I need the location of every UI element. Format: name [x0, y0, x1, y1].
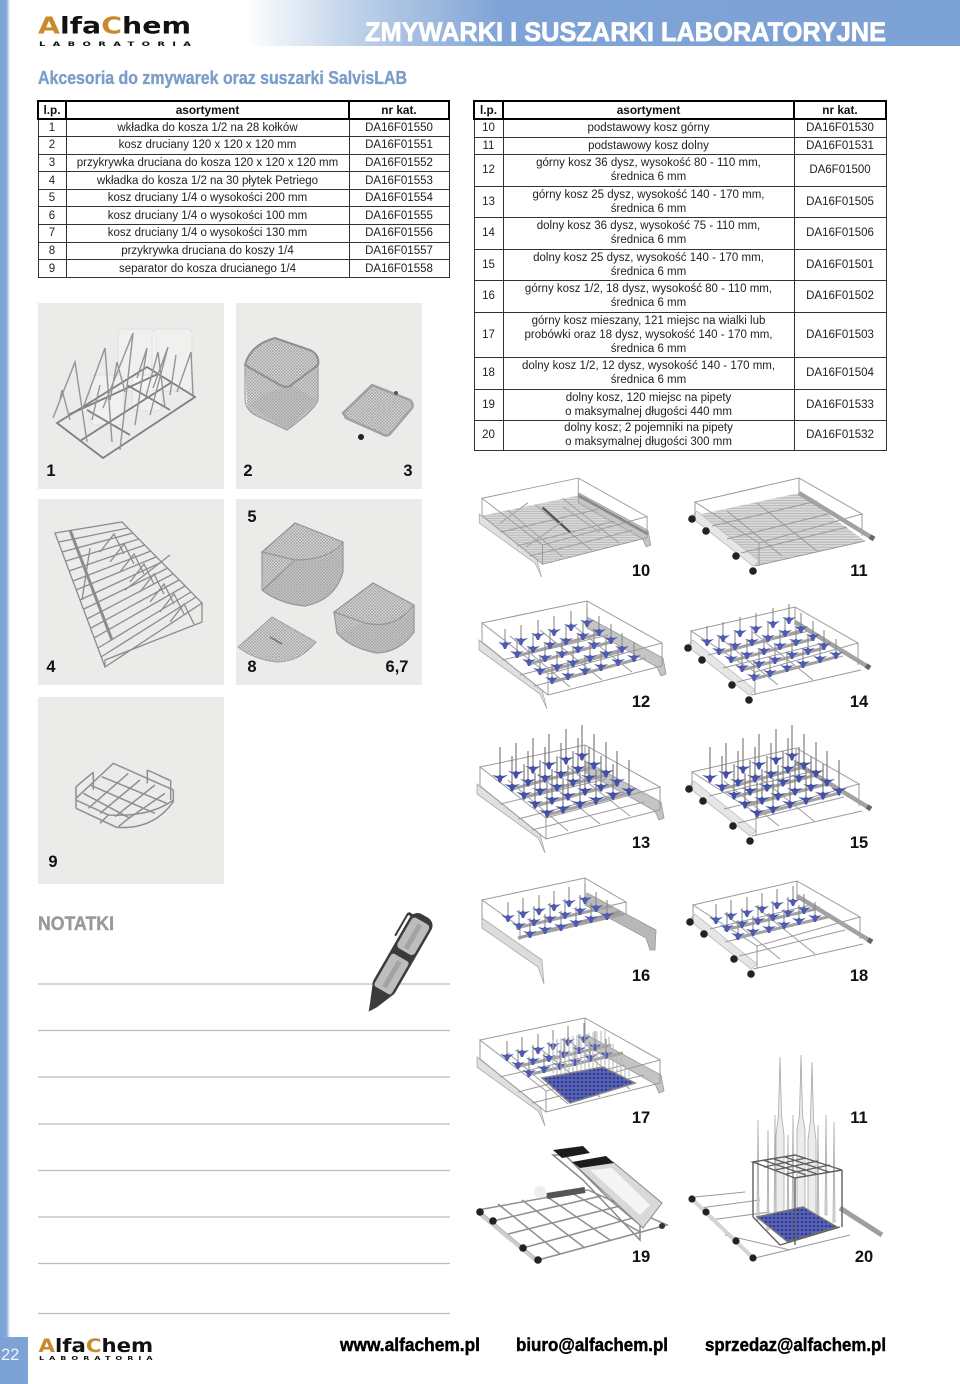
item 16 half rack: [482, 878, 656, 985]
item 20 pipette rack: 20: [855, 1248, 873, 1266]
item 10 upper rack with mesh: [479, 478, 651, 580]
footer logo: LABORATORIA: [39, 1356, 154, 1361]
photo: items 5 6 7 8 semi-round baskets: 8: [247, 658, 257, 676]
item 19 pipette rack: 19: [632, 1248, 650, 1266]
item 13 rack: 13: [632, 834, 650, 852]
notes ruled lines: [38, 984, 450, 1314]
table: accessories 1-9: 9: [49, 263, 55, 275]
logo top: AlfaChem: [38, 13, 191, 40]
icon: pen: [356, 908, 436, 1018]
header gradient band: [245, 0, 960, 46]
table: accessories 10-20: dolny kosz 25 dysz, wysokość 140 - 170 mm,: [533, 252, 764, 264]
photo: item 9 separator: [38, 697, 224, 884]
table: accessories 1-9: DA16F01550: [365, 122, 433, 134]
table: accessories 1-9: 5: [49, 192, 55, 204]
table: accessories 1-9: DA16F01555: [365, 210, 433, 222]
table: accessories 10-20: DA16F01530: [806, 122, 874, 134]
table: accessories 1-9: asortyment: [176, 103, 239, 117]
photo: item 9 separator: 9: [48, 853, 58, 871]
item 11 lower rack with mesh: [688, 478, 874, 580]
photo: items 5 6 7 8 semi-round baskets: [236, 499, 422, 685]
photo: items 5 6 7 8 semi-round baskets: 6,7: [386, 658, 408, 676]
table: accessories 10-20: probówki oraz 18 dysz, wysokość 140 - 170 mm,: [524, 328, 772, 340]
item 18 lower rack: [686, 881, 872, 985]
item 16 half rack: 16: [632, 967, 650, 985]
table: accessories 10-20: dolny kosz 36 dysz, wysokość 75 - 110 mm,: [537, 220, 760, 232]
table: accessories 10-20: DA16F01501: [806, 258, 874, 270]
table: accessories 10-20: 16: [482, 290, 495, 302]
section heading: Akcesoria do zmywarek oraz suszarki SalvisLAB: [38, 68, 407, 88]
footer email sprzedaz: sprzedaz@alfachem.pl: [705, 1335, 886, 1355]
page title: ZMYWARKI I SUSZARKI LABORATORYJNE: [365, 17, 886, 47]
table: accessories 1-9: wkładka do kosza 1/2 na 30 płytek Petriego: [97, 175, 318, 187]
table: accessories 10-20: DA16F01502: [806, 290, 874, 302]
photo: items 2 and 3 mesh cube and lid: 3: [403, 462, 413, 480]
table: accessories 1-9: kosz druciany 1/4 o wysokości 130 mm: [108, 227, 307, 239]
photo: items 2 and 3 mesh cube and lid: [236, 303, 422, 489]
table: accessories 10-20: dolny kosz, 120 miejsc na pipety: [566, 392, 731, 404]
page number box: 22: [1, 1346, 19, 1364]
page number box: [0, 1337, 28, 1384]
table: accessories 10-20: średnica 6 mm: [611, 234, 686, 246]
table: accessories 1-9: kosz druciany 120 x 120 x 120 mm: [119, 139, 296, 151]
table: accessories 1-9: l.p.: [43, 103, 61, 117]
item 14 rack: 14: [850, 693, 869, 711]
table: accessories 1-9: 2: [49, 139, 55, 151]
table: accessories 10-20: górny kosz 25 dysz, wysokość 140 - 170 mm,: [532, 188, 764, 200]
table: accessories 10-20: asortyment: [617, 103, 680, 117]
table: accessories 10-20: nr kat.: [822, 103, 858, 117]
table: accessories 10-20: 19: [482, 398, 495, 410]
item 19 pipette rack: [476, 1146, 667, 1266]
item 20 pipette rack: [688, 1055, 882, 1266]
table: accessories 10-20: 15: [482, 258, 495, 270]
table: accessories 10-20: 12: [482, 164, 495, 176]
table: accessories 10-20: średnica 6 mm: [611, 342, 686, 354]
item 17 mixed rack: [477, 1018, 664, 1127]
item 10 upper rack with mesh: 10: [632, 562, 650, 580]
table: accessories 1-9: DA16F01553: [365, 175, 433, 187]
table: accessories 1-9: 3: [49, 157, 55, 169]
photo: items 5 6 7 8 semi-round baskets: 5: [247, 508, 257, 526]
item 15 rack: [685, 725, 871, 852]
table: accessories 1-9: DA16F01554: [365, 192, 433, 204]
table: accessories 1-9: DA16F01551: [365, 139, 433, 151]
table: accessories 10-20: [473, 100, 887, 451]
table: accessories 10-20: o maksymalnej długości 440 mm: [565, 406, 732, 418]
item 11 pipette tray label: 11: [850, 1109, 868, 1127]
table: accessories 1-9: DA16F01552: [365, 157, 433, 169]
table: accessories 10-20: średnica 6 mm: [611, 266, 686, 278]
table: accessories 10-20: DA16F01504: [806, 367, 874, 379]
table: accessories 1-9: przykrywka druciana do koszy 1/4: [121, 245, 294, 257]
table: accessories 10-20: DA16F01505: [806, 196, 874, 208]
table: accessories 1-9: DA16F01557: [365, 245, 433, 257]
photo: item 4 plate rack: 4: [46, 658, 56, 676]
item 15 rack: 15: [850, 834, 868, 852]
table: accessories 10-20: DA16F01503: [806, 328, 874, 340]
table: accessories 10-20: DA16F01532: [806, 429, 874, 441]
table: accessories 1-9: 4: [49, 175, 55, 187]
table: accessories 10-20: górny kosz 36 dysz, wysokość 80 - 110 mm,: [536, 157, 761, 169]
table: accessories 1-9: [37, 100, 450, 278]
photo: item 4 plate rack: [38, 499, 224, 685]
table: accessories 10-20: 13: [482, 196, 495, 208]
photo: item 1 peg insert: 1: [46, 462, 56, 480]
table: accessories 10-20: DA6F01500: [809, 164, 871, 176]
table: accessories 10-20: dolny kosz 1/2, 12 dysz, wysokość 140 - 170 mm,: [522, 360, 775, 372]
table: accessories 10-20: o maksymalnej długości 300 mm: [565, 436, 732, 448]
table: accessories 10-20: 17: [482, 328, 495, 340]
table: accessories 1-9: DA16F01556: [365, 227, 433, 239]
notes heading: NOTATKI: [38, 914, 114, 935]
table: accessories 1-9: kosz druciany 1/4 o wysokości 100 mm: [108, 210, 307, 222]
footer email biuro: biuro@alfachem.pl: [516, 1335, 668, 1355]
table: accessories 10-20: DA16F01506: [806, 227, 874, 239]
item 11 lower rack with mesh: 11: [850, 562, 868, 580]
photo: items 2 and 3 mesh cube and lid: 2: [243, 462, 253, 480]
table: accessories 10-20: 11: [483, 140, 494, 152]
left side stripe: [0, 0, 10, 1337]
footer website: www.alfachem.pl: [339, 1335, 480, 1355]
item 13 rack: [477, 725, 664, 853]
table: accessories 10-20: średnica 6 mm: [611, 297, 686, 309]
item 12 rack: 12: [632, 693, 650, 711]
table: accessories 10-20: DA16F01531: [806, 140, 874, 152]
table: accessories 10-20: średnica 6 mm: [611, 171, 686, 183]
table: accessories 1-9: kosz druciany 1/4 o wysokości 200 mm: [108, 192, 307, 204]
table: accessories 10-20: dolny kosz; 2 pojemniki na pipety: [564, 422, 733, 434]
table: accessories 1-9: separator do kosza drucianego 1/4: [119, 263, 296, 275]
table: accessories 10-20: górny kosz mieszany, 121 miejsc na wialki lub: [532, 314, 765, 326]
item 17 mixed rack: 17: [632, 1109, 650, 1127]
item 18 lower rack: 18: [850, 967, 868, 985]
table: accessories 10-20: podstawowy kosz dolny: [588, 140, 709, 152]
logo top: LABORATORIA: [39, 40, 192, 47]
item 12 rack: [479, 601, 666, 711]
footer logo: AlfaChem: [38, 1335, 153, 1357]
table: accessories 1-9: 7: [49, 227, 55, 239]
table: accessories 10-20: l.p.: [480, 103, 497, 117]
photo: item 1 peg insert: [38, 303, 224, 489]
table: accessories 10-20: 10: [482, 122, 495, 134]
table: accessories 10-20: średnica 6 mm: [611, 374, 686, 386]
table: accessories 10-20: 14: [482, 227, 495, 239]
table: accessories 1-9: 1: [49, 122, 55, 134]
table: accessories 10-20: 18: [482, 367, 495, 379]
table: accessories 10-20: górny kosz 1/2, 18 dysz, wysokość 80 - 110 mm,: [525, 283, 772, 295]
table: accessories 1-9: wkładka do kosza 1/2 na 28 kołków: [117, 122, 298, 134]
table: accessories 1-9: DA16F01558: [365, 263, 433, 275]
table: accessories 10-20: DA16F01533: [806, 398, 874, 410]
table: accessories 1-9: 6: [49, 210, 55, 222]
table: accessories 10-20: podstawowy kosz górny: [587, 122, 710, 134]
table: accessories 1-9: przykrywka druciana do kosza 120 x 120 x 120 mm: [77, 157, 338, 169]
table: accessories 1-9: 8: [49, 245, 55, 257]
table: accessories 10-20: 20: [482, 429, 495, 441]
item 14 rack: [684, 604, 870, 711]
table: accessories 10-20: średnica 6 mm: [611, 202, 686, 214]
table: accessories 1-9: nr kat.: [381, 103, 417, 117]
